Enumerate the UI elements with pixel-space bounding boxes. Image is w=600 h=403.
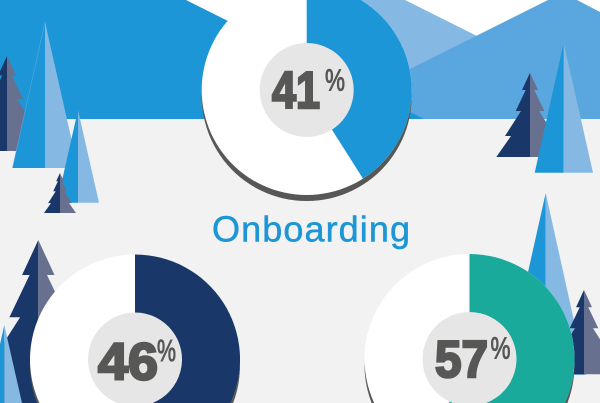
tree: bottom left dark	[0, 240, 101, 403]
value: 46%: %	[157, 333, 176, 368]
tree: small dark	[44, 173, 76, 213]
tree: right dark	[496, 73, 564, 157]
donut: 57%	[364, 254, 574, 403]
tree: left dark	[0, 56, 45, 151]
tree: bottom left cone	[0, 325, 22, 403]
tree: left tall cone	[12, 22, 78, 168]
tree: bottom right cone	[505, 193, 586, 375]
value: 41%: %	[325, 62, 345, 98]
value: 41%: 41	[272, 62, 320, 120]
sky	[0, 0, 600, 119]
donut: 46%	[30, 254, 240, 403]
ground	[0, 119, 600, 403]
value: 46%: 46	[98, 334, 158, 392]
value: 57%: %	[490, 330, 510, 366]
tree: bottom right dark	[550, 290, 600, 374]
value: 57%: 57	[435, 331, 488, 389]
mountains	[0, 0, 600, 119]
heading: Onboarding: Onboarding	[212, 208, 410, 250]
tree: right cone	[535, 43, 593, 173]
tree: left small cone	[57, 110, 99, 203]
donut: 41%	[202, 0, 412, 201]
